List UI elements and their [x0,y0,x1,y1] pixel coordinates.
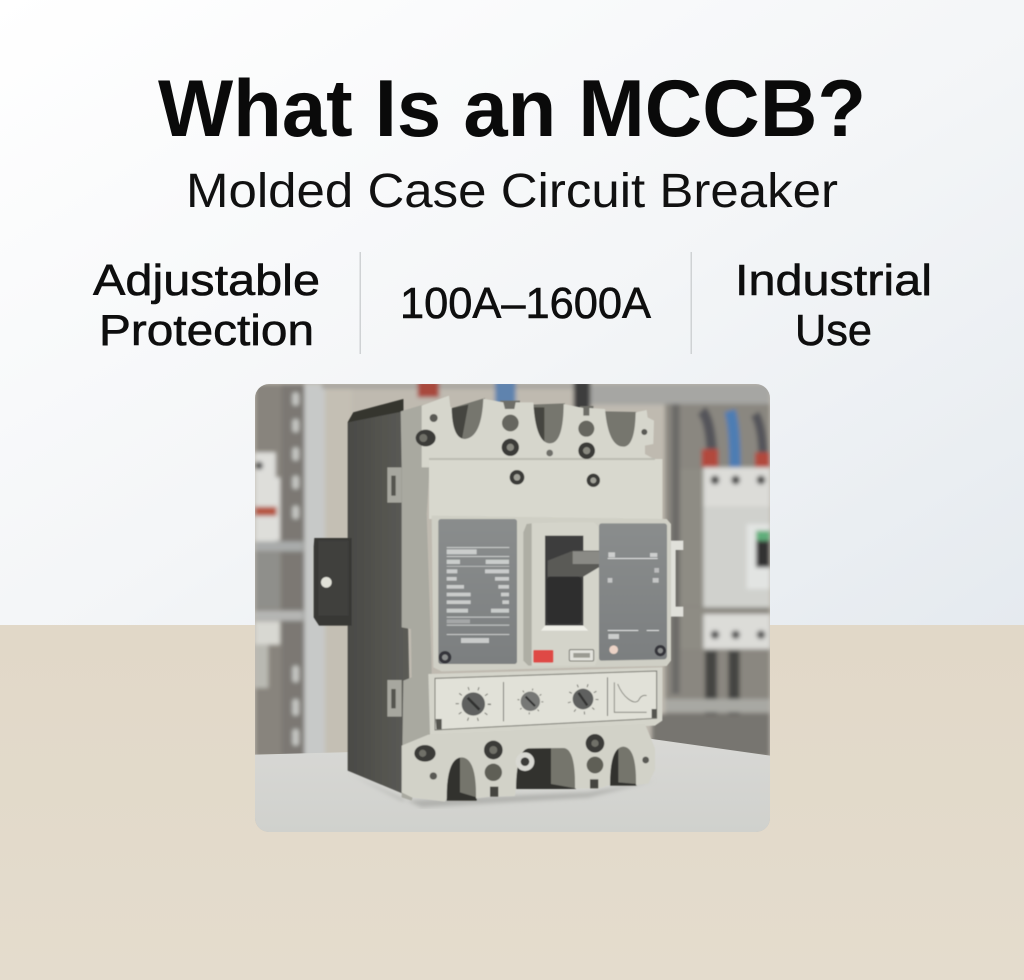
feature: industrial use: Use [795,306,872,355]
title: What Is an MCCB? [158,64,866,154]
upper cover [429,459,662,519]
side mounting bracket [314,538,352,626]
feature: industrial use: Industrial [735,256,932,305]
feature: industrial use [735,256,932,355]
terminal recesses behind top block [450,398,637,449]
dark side [348,399,412,797]
table surface [255,738,770,832]
photo: molded case circuit breaker [248,377,782,844]
divider left [360,252,361,354]
feature: current range: 100A–1600A [400,279,652,328]
trip curve diagram [614,682,647,712]
side clip tabs [387,467,402,503]
small label [569,650,594,661]
breaker body [314,396,683,802]
bottom terminal block [402,724,655,802]
toggle handle [548,551,603,577]
middle body [432,516,671,671]
breaker shadow [377,786,633,808]
top terminal block [422,396,654,467]
background floor [0,625,1024,980]
blurred panel background [248,377,782,844]
feature: adjustable protection [93,256,320,355]
screws [414,430,604,762]
dial panel [428,667,662,735]
divider right [690,252,692,354]
label text lines [447,547,509,643]
dial 2 [518,689,542,713]
terminal recesses behind bottom block [447,746,637,801]
side shoulder [401,405,432,801]
dial 1 [457,688,489,720]
dial 3 [569,685,597,713]
right clip [671,541,683,617]
left grey label panel [438,519,517,664]
feature: adjustable protection: Protection [99,306,314,355]
toggle surround [523,522,598,666]
subtitle: Molded Case Circuit Breaker [186,165,838,218]
right grey panel [599,523,667,661]
background wall [0,0,1024,625]
red button [533,650,553,663]
feature: adjustable protection: Adjustable [93,256,320,305]
